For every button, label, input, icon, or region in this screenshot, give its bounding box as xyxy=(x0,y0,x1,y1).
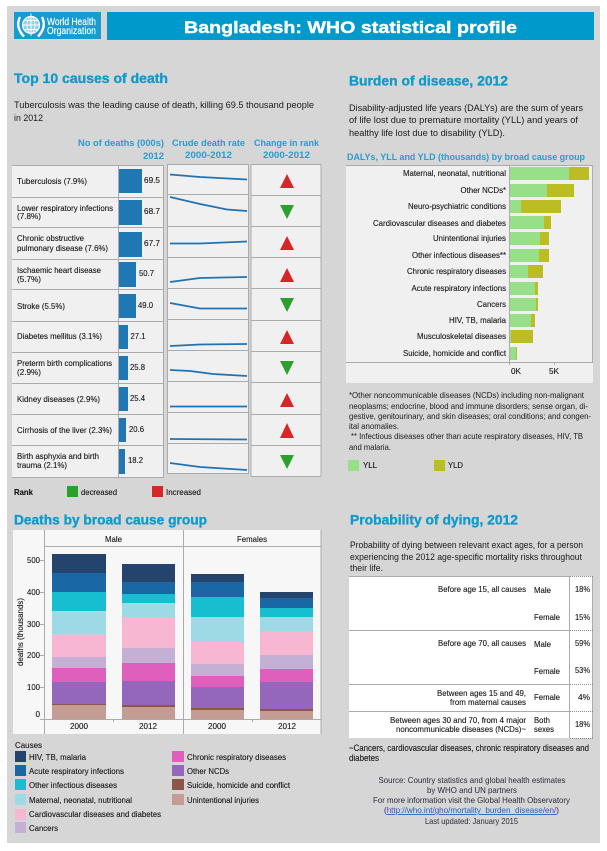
row: before age 15: Male xyxy=(534,585,551,595)
text block: footnotes: *Other noncommunicable diseases (NCDs) including non-malignant xyxy=(349,390,585,400)
y axis labels xyxy=(15,555,40,719)
row: birth asphyxia and birth trauma: 18.2 xyxy=(128,455,143,465)
row: COPD: 67.7 xyxy=(144,238,160,248)
row: kidney diseases: Kidney diseases (2.9%) xyxy=(17,394,100,404)
x axis labels xyxy=(70,721,296,731)
legend: YLL and YLD: YLD xyxy=(448,460,463,470)
row: before age 70: 53% xyxy=(575,665,590,675)
row: preterm birth complications: 25.8 xyxy=(130,362,145,372)
text block: table note: diabetes xyxy=(349,753,380,763)
row: diabetes mellitus: 27.1 xyxy=(130,331,146,341)
heading: top 10 causes: Top 10 causes of death xyxy=(14,70,168,86)
legend: causes xyxy=(15,740,291,833)
row: preterm birth complications: (2.9%) xyxy=(17,367,41,377)
stacked bar: female 2000 xyxy=(191,574,244,719)
source credits: For more information visit the Global Health Observatory xyxy=(373,795,571,805)
row: lower respiratory infections: 68.7 xyxy=(144,206,160,216)
source credits: Last updated: January 2015 xyxy=(425,816,518,826)
bar chart: DALYs by cause group: Unintentional injuries xyxy=(433,233,506,243)
row: maternal causes: Female xyxy=(534,692,560,702)
row: before age 15: 18% xyxy=(575,584,590,594)
column heading: number of deaths xyxy=(78,138,164,161)
row: noncommunicable diseases: Both xyxy=(534,715,550,725)
row: birth asphyxia and birth trauma: trauma (2.1%) xyxy=(17,460,67,470)
source credits xyxy=(373,775,571,826)
column heading: crude death rate: Crude death rate xyxy=(172,138,245,148)
legend: rank: decreased xyxy=(81,487,117,497)
row: ischaemic heart disease: (5.7%) xyxy=(17,274,41,284)
panel: top 10 causes of death xyxy=(12,70,321,497)
row: before age 70 xyxy=(438,638,590,676)
row: cirrhosis of the liver xyxy=(17,418,144,442)
y axis labels: 0 xyxy=(36,709,40,719)
text block: footnotes: and malaria. xyxy=(349,442,391,452)
text block: DALY definition: Disability-adjusted life years (DALYs) are the sum of years xyxy=(349,102,583,113)
header: WHO logo: World Health xyxy=(47,16,96,28)
row: lower respiratory infections xyxy=(17,200,160,225)
row: preterm birth complications: Preterm birth complications xyxy=(17,358,112,368)
legend: causes: Maternal, neonatal, nutritional xyxy=(29,795,132,805)
legend: causes: Suicide, homicide and conflict xyxy=(187,780,291,790)
text block: footnotes: ** Infectious diseases other than acute respiratory diseases, HIV, TB xyxy=(351,431,583,441)
bar chart: DALYs by cause group: Maternal, neonatal, nutritional xyxy=(403,168,506,178)
text block: probability intro: experiencing the 2012 age-specific mortality risks throughout xyxy=(350,551,582,562)
row: before age 70: 59% xyxy=(575,638,590,648)
source credits: Source: Country statistics and global health estimates xyxy=(378,775,566,785)
row: lower respiratory infections: (7.8%) xyxy=(17,211,41,221)
row: noncommunicable diseases xyxy=(390,715,590,734)
heading: deaths by cause group: Deaths by broad cause group xyxy=(14,512,207,528)
bar chart: DALYs by cause group: Cardiovascular diseases and diabetes xyxy=(373,218,506,228)
row: ischaemic heart disease: Ischaemic heart disease xyxy=(17,265,101,275)
legend: causes: Chronic respiratory diseases xyxy=(187,752,286,762)
y axis labels: 100 xyxy=(27,682,40,692)
chart facet headers: Male xyxy=(105,534,122,544)
row: COPD: pulmonary disease (7.6%) xyxy=(17,243,108,253)
bar chart: DALYs by cause group: HIV, TB, malaria xyxy=(449,315,506,325)
row: before age 15: Female xyxy=(534,612,560,622)
text block: DALY definition: healthy life lost due to disability (YLD). xyxy=(349,127,505,138)
row: before age 70: Male xyxy=(534,639,551,649)
legend: YLL and YLD: YLL xyxy=(363,460,377,470)
row: diabetes mellitus: Diabetes mellitus (3.1%) xyxy=(17,331,102,341)
row: ischaemic heart disease xyxy=(17,262,154,287)
x axis labels: 2012 xyxy=(139,721,157,731)
chart facet headers xyxy=(105,534,267,544)
chart: crude death rate sparklines xyxy=(167,164,249,474)
text block: top 10 intro: Tuberculosis was the leading cause of death, killing 69.5 thousand people xyxy=(14,99,314,110)
row: tuberculosis: Tuberculosis (7.9%) xyxy=(17,176,87,186)
bar chart: DALYs by cause group: 0K xyxy=(511,366,521,376)
row: before age 15: 15% xyxy=(575,612,590,622)
y axis labels: 400 xyxy=(27,587,40,597)
row: birth asphyxia and birth trauma xyxy=(17,449,143,474)
column heading: crude death rate xyxy=(172,138,245,160)
row: kidney diseases: 25.4 xyxy=(130,393,145,403)
row: tuberculosis: 69.5 xyxy=(144,175,160,185)
bar chart: DALYs by cause group xyxy=(346,165,593,383)
row: tuberculosis xyxy=(17,169,160,193)
row: maternal causes: Between ages 15 and 49, xyxy=(437,688,526,698)
legend: causes: Cardiovascular diseases and diabetes xyxy=(29,809,161,819)
row: maternal causes xyxy=(437,688,590,707)
row: kidney diseases xyxy=(17,387,145,411)
panel: probability of dying xyxy=(349,512,593,763)
text block: top 10 intro xyxy=(14,99,314,123)
x axis labels: 2000 xyxy=(208,721,226,731)
column heading: number of deaths: 2012 xyxy=(143,151,164,161)
row: COPD xyxy=(17,232,160,257)
legend: causes: Cancers xyxy=(29,823,58,833)
header: title banner xyxy=(107,12,594,40)
row: maternal causes: from maternal causes xyxy=(450,697,526,707)
row: cirrhosis of the liver: Cirrhosis of the liver (2.3%) xyxy=(17,425,112,435)
heading: probability of dying: Probability of dying, 2012 xyxy=(350,512,518,528)
column heading: change in rank: Change in rank xyxy=(254,138,320,148)
y axis labels: 500 xyxy=(27,555,40,565)
row: before age 70: Female xyxy=(534,666,560,676)
source credits: (http://who.int/gho/mortality_burden_disease/en/) xyxy=(384,805,559,815)
bar chart: DALYs by cause group: Musculoskeletal diseases xyxy=(417,331,506,341)
row: stroke xyxy=(17,294,153,318)
text block: DALY definition xyxy=(349,102,583,138)
legend: causes: Causes xyxy=(15,740,42,750)
legend: causes: Acute respiratory infections xyxy=(29,766,124,776)
header: WHO logo: Organization xyxy=(47,25,96,37)
row: diabetes mellitus xyxy=(17,325,146,349)
stacked bar chart: deaths xyxy=(13,530,321,734)
row: stroke: 49.0 xyxy=(138,300,153,310)
table: causes and death counts xyxy=(12,165,164,478)
legend: causes: HIV, TB, malaria xyxy=(29,752,86,762)
table: probability of dying xyxy=(349,576,593,738)
column heading: crude death rate: 2000-2012 xyxy=(185,150,232,160)
text block: footnotes: ital anomalies. xyxy=(349,421,399,431)
heading: burden of disease: Burden of disease, 2012 xyxy=(349,72,508,88)
bar chart: DALYs by cause group: Neuro-psychiatric conditions xyxy=(408,201,506,211)
legend: causes: Unintentional injuries xyxy=(187,795,259,805)
row: before age 70: Before age 70, all causes xyxy=(438,638,526,648)
row: noncommunicable diseases: noncommunicable diseases (NCDs)~ xyxy=(396,724,526,734)
text block: DALY definition: of life lost due to premature mortality (YLL) and years of xyxy=(349,114,578,125)
bar chart: DALYs by cause group: Other infectious diseases** xyxy=(412,250,507,260)
column heading: change in rank: 2000-2012 xyxy=(263,150,310,160)
panel: deaths by broad cause group xyxy=(13,512,321,833)
bar chart: DALYs by cause group: Cancers xyxy=(477,299,506,309)
legend: causes: Other infectious diseases xyxy=(29,780,117,790)
row: cirrhosis of the liver: 20.6 xyxy=(129,424,144,434)
row: COPD: Chronic obstructive xyxy=(17,233,84,243)
row: noncommunicable diseases: sexes xyxy=(534,724,554,734)
bar chart: DALYs by cause group: Chronic respiratory diseases xyxy=(407,266,506,276)
legend: rank: Increased xyxy=(166,487,201,497)
row: before age 15 xyxy=(438,584,590,622)
text block: probability intro: their life. xyxy=(350,562,383,573)
source credits: by WHO and UN partners xyxy=(427,785,518,795)
text block: probability intro: Probability of dying between relevant exact ages, for a person xyxy=(350,539,583,550)
row: before age 15: Before age 15, all causes xyxy=(438,584,526,594)
row: preterm birth complications xyxy=(17,356,145,380)
row: ischaemic heart disease: 50.7 xyxy=(139,268,154,278)
stacked bar: male 2000 xyxy=(52,554,106,719)
row: maternal causes: 4% xyxy=(578,692,590,702)
text block: top 10 intro: in 2012 xyxy=(14,112,43,123)
legend: rank xyxy=(14,486,201,497)
header: WHO logo xyxy=(14,12,101,39)
y axis labels: 200 xyxy=(27,650,40,660)
row: lower respiratory infections: Lower respiratory infections xyxy=(17,203,113,213)
column heading: number of deaths: No of deaths (000s) xyxy=(78,138,164,148)
row: birth asphyxia and birth trauma: Birth asphyxia and birth xyxy=(17,451,99,461)
bar chart: DALYs by cause group: 5K xyxy=(549,366,559,376)
column heading: change in rank xyxy=(254,138,320,160)
text block: footnotes xyxy=(349,390,591,452)
chart: change in rank arrows xyxy=(251,164,321,476)
row: noncommunicable diseases: Between ages 30 and 70, from 4 major xyxy=(390,715,526,725)
chart facet headers: Females xyxy=(237,534,267,544)
header: title banner: Bangladesh: WHO statistical profile xyxy=(184,18,517,37)
stacked bar: female 2012 xyxy=(260,592,313,719)
y axis labels: 300 xyxy=(27,619,40,629)
legend: rank: Rank xyxy=(14,487,33,497)
bar chart: DALYs by cause group: Other NCDs* xyxy=(460,185,507,195)
stacked bar: male 2012 xyxy=(122,564,175,719)
legend: YLL and YLD xyxy=(348,460,463,471)
text block: table note xyxy=(349,743,589,763)
x axis labels: 2012 xyxy=(278,721,296,731)
row: noncommunicable diseases: 18% xyxy=(575,719,590,729)
legend: causes: Other NCDs xyxy=(187,766,229,776)
y axis labels: deaths (thousands) xyxy=(15,598,25,666)
bar chart: DALYs by cause group: Acute respiratory infections xyxy=(412,283,506,293)
x axis labels: 2000 xyxy=(70,721,88,731)
chart title: DALYs: DALYs, YLL and YLD (thousands) by broad cause group xyxy=(347,152,585,162)
panel: burden of disease xyxy=(346,72,593,471)
bar chart: DALYs by cause group: Suicide, homicide and conflict xyxy=(403,348,507,358)
row: stroke: Stroke (5.5%) xyxy=(17,301,65,311)
text block: probability intro xyxy=(350,539,583,573)
